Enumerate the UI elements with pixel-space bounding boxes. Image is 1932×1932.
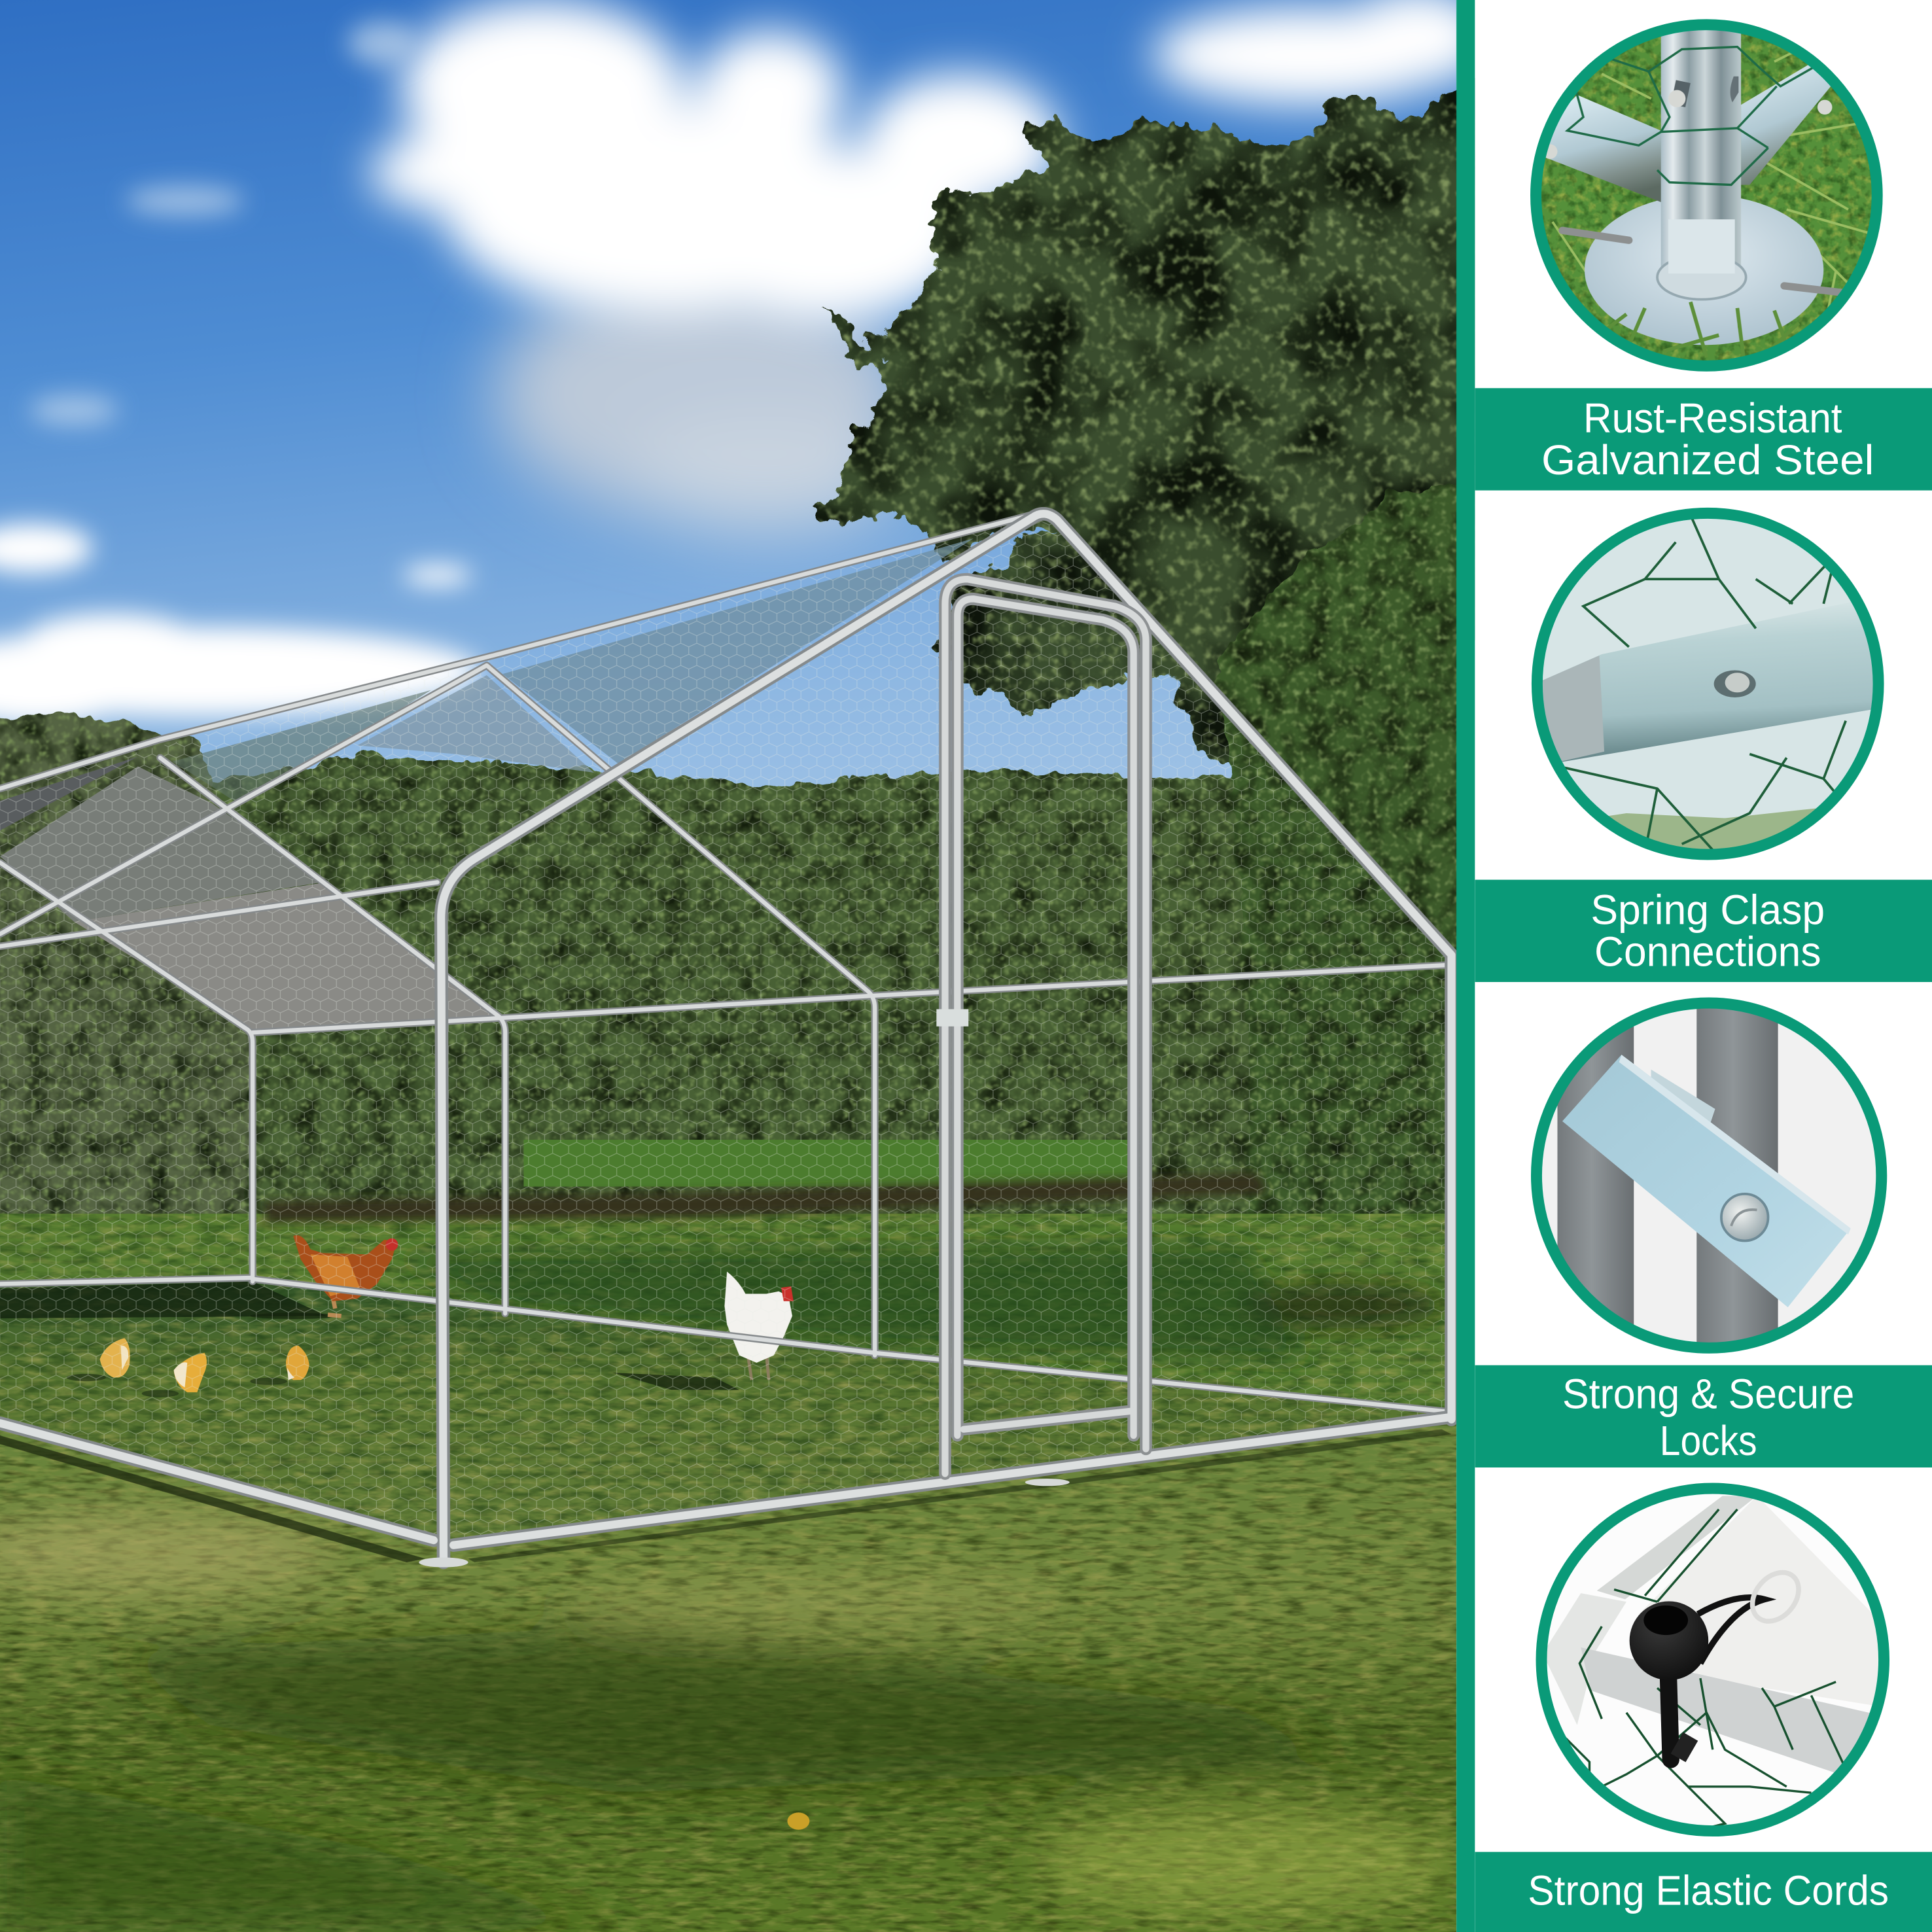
door latch	[936, 1009, 968, 1027]
chicken wire mesh	[0, 512, 1452, 1550]
chick 3	[250, 1346, 309, 1385]
sky	[0, 0, 1456, 1232]
chick 2	[142, 1353, 207, 1397]
back lawn strip	[523, 1140, 1127, 1187]
label text: Connections	[1594, 928, 1821, 975]
big tree	[826, 86, 1515, 764]
label text: Galvanized Steel	[1541, 436, 1874, 483]
label text	[1590, 886, 1825, 975]
label band	[1475, 388, 1932, 491]
enclosure ground	[0, 1279, 1452, 1547]
detail photo: steel post base	[1528, 12, 1885, 376]
feature: strong elastic cords	[1475, 1479, 1932, 1932]
foreground lawn	[0, 1417, 1456, 1932]
back lawn	[0, 1214, 1456, 1435]
detail photo: elastic ball cord	[1534, 1479, 1897, 1842]
brown hen	[250, 1235, 398, 1319]
chick 1	[67, 1338, 130, 1381]
white side panel	[1475, 0, 1932, 1932]
photo: chicken run scene	[0, 0, 1515, 1932]
background hedges	[173, 754, 1269, 1232]
white hen	[612, 1272, 794, 1390]
detail photo: spring clasp on tube	[1528, 505, 1891, 862]
yellow flower	[787, 1812, 809, 1830]
label band	[1475, 1852, 1932, 1932]
label text: Strong & Secure	[1562, 1371, 1854, 1418]
label text: Locks	[1660, 1417, 1757, 1464]
lawn shadow	[395, 1244, 1441, 1361]
detail photo: lock plate	[1528, 992, 1891, 1361]
feature: rust-resistant galvanized steel	[1475, 12, 1932, 491]
dirt strip	[265, 1173, 1269, 1222]
label text: Rust-Resistant	[1583, 395, 1842, 442]
hedge left	[0, 712, 253, 1226]
feature: spring clasp connections	[1475, 505, 1932, 982]
upper roof cover	[173, 538, 974, 801]
feature: strong and secure locks	[1475, 992, 1932, 1467]
green divider bar	[1456, 0, 1475, 1932]
label band	[1475, 1365, 1932, 1467]
label text	[1541, 395, 1874, 483]
clouds	[0, 0, 1491, 724]
steel frame	[0, 512, 1452, 1562]
label band	[1475, 880, 1932, 982]
label text	[1562, 1371, 1854, 1464]
lower roof cover	[0, 756, 499, 1030]
bush right	[1214, 483, 1466, 1312]
ground shadows	[0, 1282, 1454, 1932]
label text: Strong Elastic Cords	[1528, 1867, 1889, 1914]
label text: Spring Clasp	[1590, 886, 1825, 933]
post base plates	[419, 1479, 1070, 1568]
